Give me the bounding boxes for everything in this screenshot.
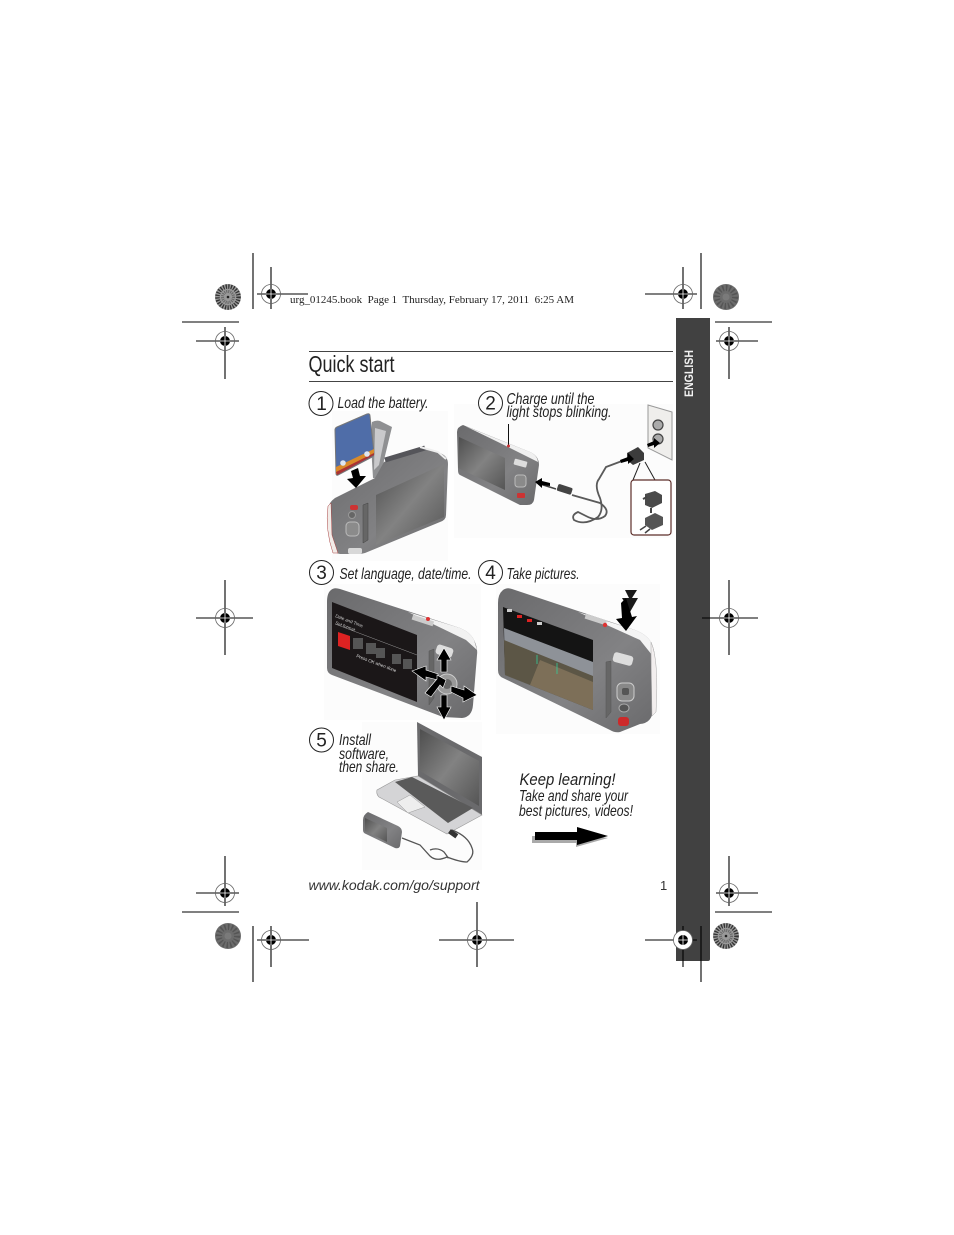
print slug: urg_01245.book Page 1 Thursday, February 17, 2011 6:25 AM: [290, 295, 574, 306]
callout: keep learning: Take and share your: [519, 788, 629, 805]
step 1 caption: Load the battery.: [338, 395, 428, 412]
printer crop and registration marks: [182, 253, 772, 982]
arrow: next page: [532, 827, 608, 847]
step 1 number: [309, 392, 333, 416]
sidebar label: ENGLISH: [682, 350, 696, 397]
step 3 number: [310, 560, 334, 584]
step 5 caption: software,: [339, 746, 389, 763]
inset: plug adapters: [631, 480, 671, 535]
step 2 number: [478, 391, 502, 415]
step 5 number: [310, 728, 334, 752]
step 3 number: 3: [316, 563, 327, 584]
step 2 caption: [506, 391, 612, 421]
step 2: charge: [454, 391, 673, 538]
screen: landscape photo: [503, 607, 593, 710]
step 2 caption: light stops blinking.: [506, 404, 612, 421]
sidebar tab: [676, 318, 710, 961]
arrow: insert battery: [347, 468, 366, 488]
step 1 number: 1: [316, 394, 327, 415]
charger and cable: [540, 447, 655, 522]
page number: 1: [660, 878, 667, 893]
step 5 caption: [339, 732, 399, 776]
step 3 caption: Set language, date/time.: [340, 566, 472, 583]
step 4 number: 4: [485, 563, 496, 584]
icon: wall outlet: [648, 405, 672, 460]
screen text: [335, 613, 417, 673]
screen text: Set format: [335, 620, 357, 633]
step 4 number: [478, 560, 502, 584]
arrows: navigate: [412, 648, 477, 720]
screen text: Date and Time: [335, 613, 364, 629]
footer link: www.kodak.com/go/support: [308, 877, 481, 893]
step 5: install software: [310, 722, 482, 870]
title: [308, 351, 673, 382]
illustration: camera and battery: [327, 411, 448, 561]
icon: battery: [335, 414, 374, 475]
step 2 caption: Charge until the: [506, 391, 595, 408]
step 4 caption: Take pictures.: [506, 566, 580, 583]
callout: keep learning: Keep learning!: [520, 770, 616, 789]
step 3: set language: [310, 560, 481, 720]
step 1: load the battery: [309, 392, 448, 561]
illustration: camera date and time screen: [324, 584, 481, 720]
step 5 caption: Install: [339, 732, 371, 749]
illustration: camera taking a picture: [496, 584, 660, 734]
callout: keep learning: [519, 770, 633, 820]
step 5 caption: then share.: [339, 759, 399, 776]
step 5 number: 5: [316, 730, 327, 752]
title: Quick start: [308, 351, 395, 377]
illustration: laptop with camera: [362, 722, 482, 870]
step 4: take pictures: [478, 560, 660, 734]
arrows: plug in: [535, 438, 660, 488]
screen text: Press OK when done: [356, 653, 398, 673]
illustration: camera charging from wall outlet: [454, 404, 673, 538]
step 2 number: 2: [485, 394, 496, 414]
callout: keep learning: best pictures, videos!: [519, 803, 633, 820]
arrows: press shutter: [616, 590, 638, 631]
